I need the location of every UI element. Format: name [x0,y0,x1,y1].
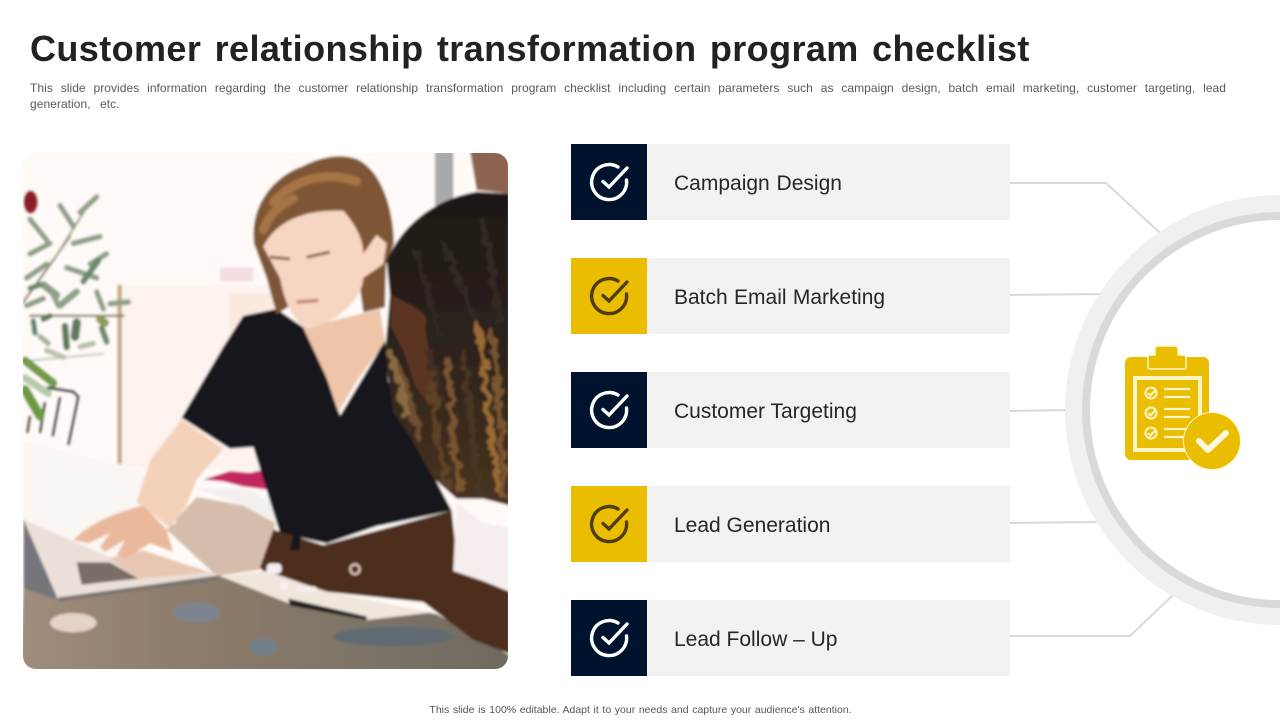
icon: clipboard with check badge [1125,346,1241,470]
inner ring [1082,212,1280,608]
label: Lead Generation [674,514,830,537]
man's face [263,211,387,329]
nails and ring [267,563,317,592]
woman's arm [260,511,510,654]
white top [453,502,510,590]
item: Lead Follow – Up [571,600,1010,676]
pen [290,534,302,551]
laptop base [23,519,220,600]
hair highlights man [263,177,357,230]
plant [23,197,128,416]
man's shirt [182,309,452,543]
connector lines [1010,182,1172,637]
icon: check gold [571,486,647,562]
item: Campaign Design [571,144,1010,220]
pink cloth [203,469,271,490]
man's hair back [253,156,394,314]
icon: check navy [571,372,647,448]
item: Customer Targeting [571,372,1010,448]
description text: generation, etc. [30,97,120,111]
item: Batch Email Marketing [571,258,1010,334]
chair [27,388,78,445]
man's neck [303,309,385,412]
table [20,576,510,674]
label: Lead Follow – Up [674,628,837,651]
icon: check navy [571,144,647,220]
label: Batch Email Marketing [674,286,885,309]
icon: check gold [571,258,647,334]
table far [167,497,275,576]
laptop lid [172,520,178,526]
hair curls [392,223,507,495]
man's hand [73,505,173,558]
central ring with clipboard icon [1065,195,1280,625]
label: Campaign Design [674,172,842,195]
background hair [470,150,510,193]
cushion [202,488,274,519]
photo: man and woman working at a laptop [23,153,508,669]
icon: check navy [571,600,647,676]
description text: This slide provides information regarding the customer relationship transformation program checklist including certain parameters such as campaign design, batch email marketing, customer targeting, lead [30,81,1226,95]
red flower [23,190,38,214]
notebook [220,571,433,620]
title: Customer relationship transformation program checklist [30,28,1030,69]
label: Customer Targeting [674,400,857,423]
window post [435,150,453,206]
item: Lead Generation [571,486,1010,562]
woman's face [391,295,437,402]
man's arm [137,419,223,528]
footer note: This slide is 100% editable. Adapt it to your needs and capture your audience's attention. [429,704,852,716]
description text [30,81,1226,111]
white centre [1090,220,1280,600]
woman's hair [385,192,510,505]
outer ring [1065,195,1280,625]
wall panel [123,285,270,471]
